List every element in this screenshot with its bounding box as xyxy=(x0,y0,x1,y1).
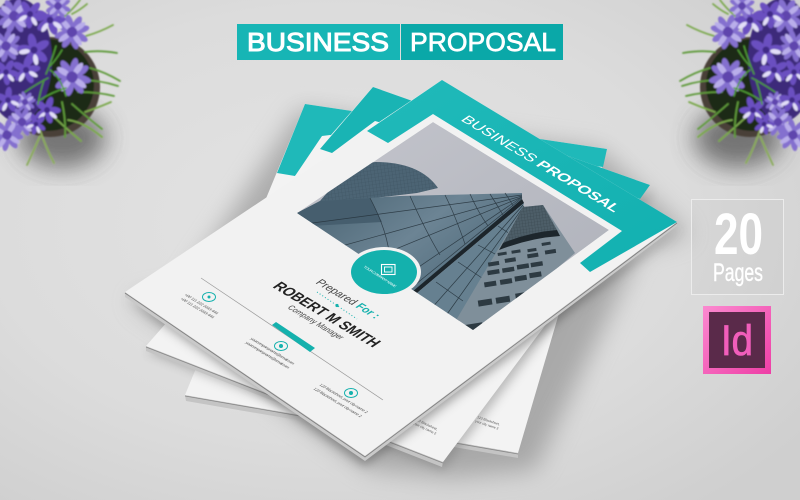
brochure: top copy shadow xyxy=(125,226,684,466)
dotted divider xyxy=(317,292,357,319)
brochure: middle copy: your city name 2 xyxy=(413,421,437,436)
brochure: bottom copy: 123 Blacksheet, xyxy=(477,415,500,426)
brochure: middle copy: 123 Blacksheet, xyxy=(415,417,438,431)
teal header and side band xyxy=(367,80,677,272)
plant: right flowers xyxy=(680,0,800,168)
brochure stack shadow xyxy=(130,110,690,478)
name: ROBERT M SMITH xyxy=(269,280,384,350)
banner right panel xyxy=(401,24,563,60)
banner word: business: BUSINESS xyxy=(247,27,389,57)
badge logo xyxy=(382,264,395,274)
page count number: 20 xyxy=(714,202,763,267)
banner left panel xyxy=(237,24,400,60)
icon: InDesign: Id xyxy=(721,317,753,365)
email addresses: yourcompanyname@email.com xyxy=(249,337,297,366)
brochure: bottom copy: your city name 2 xyxy=(475,419,499,431)
phone numbers: +00 111 222 3333 444 xyxy=(179,297,216,319)
icon: location xyxy=(344,388,358,398)
cover title: BUSINESS PROPOSAL xyxy=(458,113,626,215)
page thickness xyxy=(125,222,677,461)
cover page xyxy=(125,80,677,456)
company badge circle xyxy=(347,247,421,297)
badge text: YOUR COMPANY NAME xyxy=(362,265,398,288)
photo: glass towers xyxy=(297,122,609,340)
email addresses: yourcompanyname@email.com xyxy=(244,341,292,370)
page edge line xyxy=(125,223,677,457)
icon: email xyxy=(274,342,288,350)
page count label: Pages xyxy=(713,259,763,287)
brochure: bottom copy xyxy=(185,104,607,458)
brochure: middle copy xyxy=(146,87,650,467)
phone numbers: +00 111 222 3333 444 xyxy=(183,293,220,315)
plant: left flowers xyxy=(0,0,120,168)
title banner xyxy=(237,24,563,60)
prepared for heading: Prepared For : xyxy=(313,278,382,321)
footer rule xyxy=(201,278,383,400)
teal accent bar xyxy=(272,322,315,352)
postal address: 123 Blacksheet, your city name 2 xyxy=(312,387,364,418)
brochure: middle copy shadow xyxy=(146,192,654,470)
icon: InDesign xyxy=(703,306,771,374)
job title: Company Manager xyxy=(285,304,347,341)
page count box xyxy=(692,200,784,294)
brochure: top cover xyxy=(125,80,677,461)
icon: phone xyxy=(202,292,216,302)
postal address: 123 Blacksheet, your city name 2 xyxy=(318,383,370,414)
banner word: proposal: PROPOSAL xyxy=(410,27,556,57)
